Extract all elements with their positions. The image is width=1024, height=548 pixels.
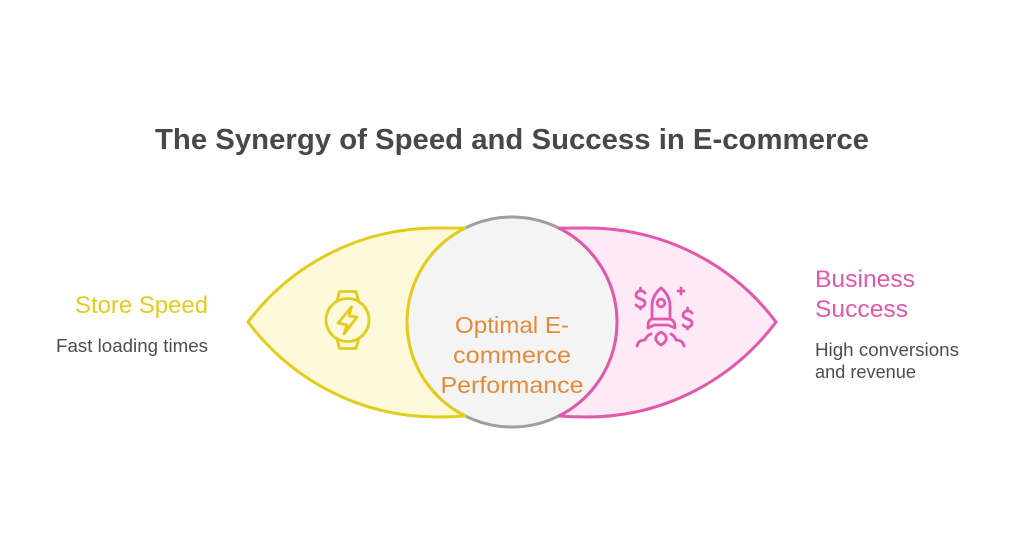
center label: commerce — [453, 342, 571, 368]
panel: business success lens — [559, 228, 776, 417]
title: The Synergy of Speed and Success in E-commerce — [155, 124, 869, 156]
panel: store speed lens — [248, 228, 465, 417]
heading: business success — [815, 266, 915, 323]
icon: rocket with dollar signs — [636, 288, 692, 346]
heading: store speed: Store Speed — [75, 292, 208, 319]
heading: business success: Business — [815, 266, 915, 293]
text: store speed description: Fast loading times — [56, 336, 208, 356]
text: business success description: and revenue — [815, 362, 916, 382]
center label: Optimal E- — [455, 312, 569, 338]
heading: business success: Success — [815, 296, 908, 323]
text: business success description — [815, 340, 959, 382]
central circle: outline — [407, 217, 617, 427]
icon: smartwatch with lightning bolt — [326, 292, 369, 348]
center label: Performance — [440, 372, 584, 398]
center label — [440, 312, 584, 398]
text: business success description: High conversions — [815, 340, 959, 360]
